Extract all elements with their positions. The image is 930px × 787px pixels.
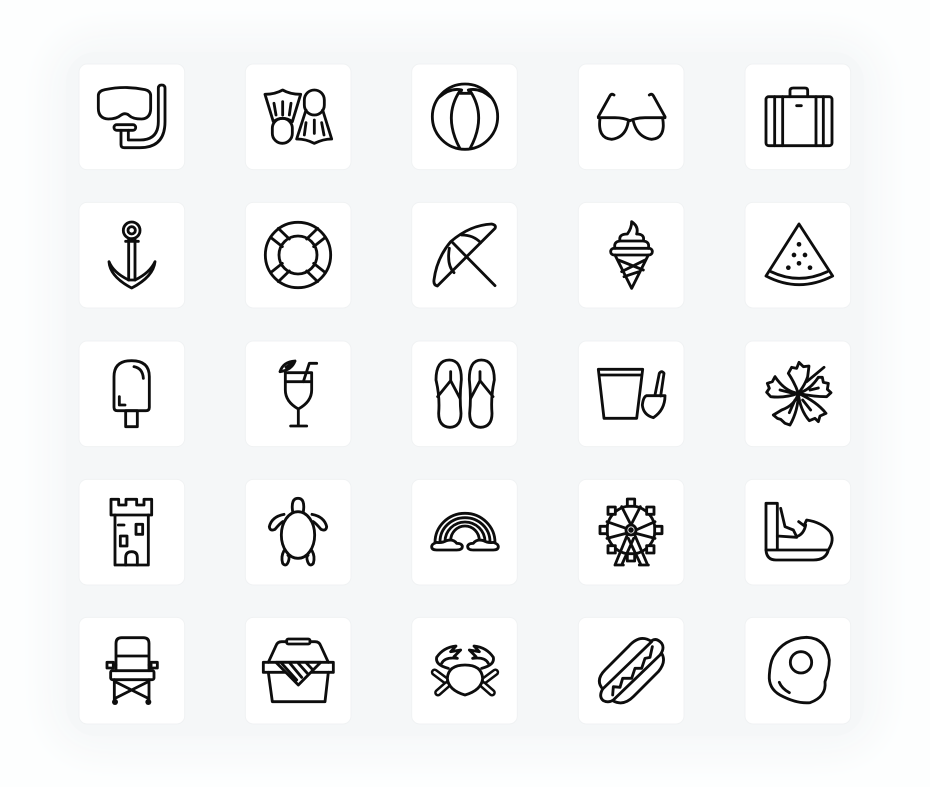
icon card: beach umbrella xyxy=(412,202,517,308)
icon card: beach ball xyxy=(412,64,517,170)
icon card: picnic basket xyxy=(245,617,351,724)
icon card: popsicle xyxy=(79,341,185,447)
icon card: ice cream cone xyxy=(578,202,684,308)
icon card: life ring xyxy=(245,202,351,308)
icon card: watermelon slice xyxy=(745,202,851,308)
icon card: folding beach chair xyxy=(79,617,185,724)
background glow xyxy=(66,52,864,736)
icon card: sea turtle xyxy=(245,479,351,585)
icon card: hot dog xyxy=(578,617,684,724)
icon card: swim fins xyxy=(245,64,351,170)
icon card: bumper car xyxy=(745,479,851,585)
icon card: cocktail xyxy=(245,341,351,447)
icon card: suitcase xyxy=(745,64,851,170)
icon card: rainbow xyxy=(412,479,517,585)
icon card: hibiscus flower xyxy=(745,341,851,447)
icon card: ferris wheel xyxy=(578,479,684,585)
icon card: snorkel mask xyxy=(79,64,185,170)
icon card: sunglasses xyxy=(578,64,684,170)
icon card: crab xyxy=(412,617,517,724)
icon card: sand bucket and shovel xyxy=(578,341,684,447)
icon card: fried egg xyxy=(745,617,851,724)
icon card: anchor xyxy=(79,202,185,308)
icon card: flip flops xyxy=(412,341,517,447)
icon card: sand castle tower xyxy=(79,479,185,585)
